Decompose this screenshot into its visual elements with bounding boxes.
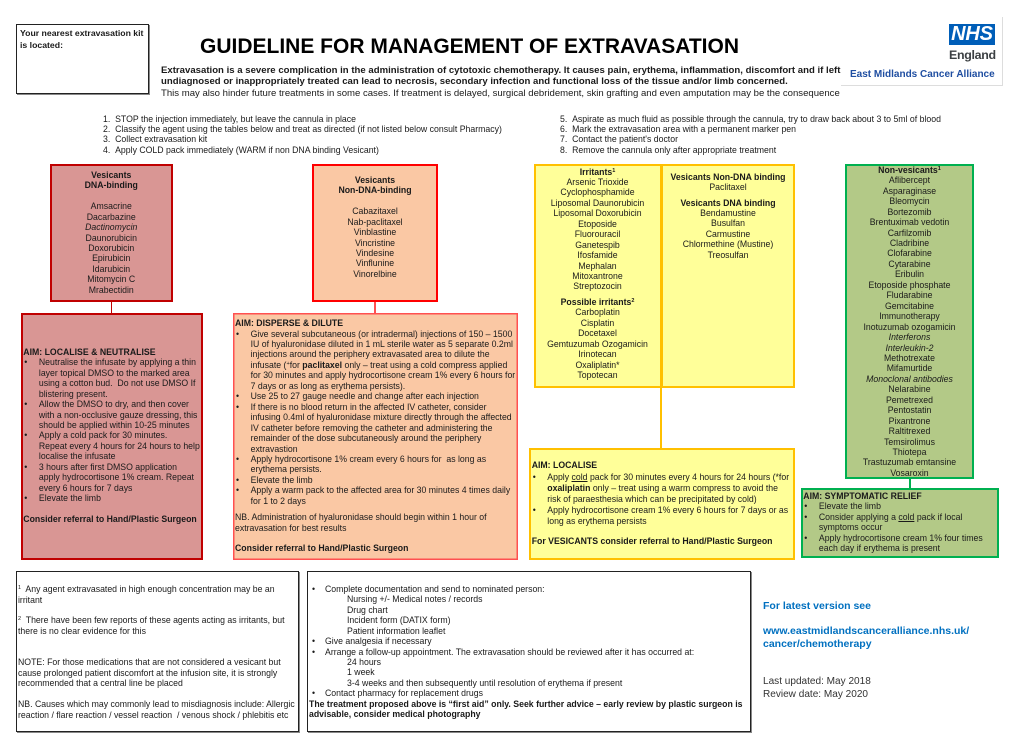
vesicants non-DNA-binding drug list (338, 175, 412, 279)
non-vesicants drug list: Inotuzumab ozogamicin (863, 322, 956, 332)
aim localise and neutralise text: Consider referral to Hand/Plastic Surgeon (23, 514, 197, 524)
irritants drug list: Liposomal Doxorubicin (553, 208, 642, 218)
aim localise and neutralise text: AIM: LOCALISE & NEUTRALISE (23, 347, 156, 357)
vesicants referral note: For VESICANTS consider referral to Hand/Plastic Surgeon (532, 536, 772, 546)
possible irritants drug list: Cisplatin (581, 318, 614, 328)
steps list left: 3. Collect extravasation kit (103, 134, 207, 144)
steps list right: 6. Mark the extravasation area with a permanent marker pen (560, 124, 796, 134)
aim localise and neutralise text: every 6 hours for 7 days (39, 483, 132, 493)
aim disperse and dilute text: Apply a warm pack to the affected area for 30 minutes 4 times daily (251, 485, 510, 495)
vesicants non-DNA-binding drug list: Non-DNA-binding (338, 185, 412, 195)
vesicants DNA binding list: Treosulfan (708, 250, 748, 260)
irritants drug list: Streptozocin (573, 281, 622, 291)
steps list right: 7. Contact the patient's doctor (560, 134, 678, 144)
introduction text (161, 64, 840, 98)
footnotes text: cause prolonged patient discomfort at the infusion site, it is strongly (18, 668, 277, 678)
follow-up actions text: Nursing +/- Medical notes / records (347, 594, 482, 604)
latest version link (763, 600, 970, 650)
follow-up actions text: Complete documentation and send to nominated person: (325, 584, 545, 594)
vesicants non-DNA-binding drug list: Nab-paclitaxel (347, 217, 403, 227)
vesicants DNA-binding drug list: Daunorubicin (86, 233, 137, 243)
hyaluronidase note and referral: Consider referral to Hand/Plastic Surgeon (235, 543, 408, 553)
irritants drug list (551, 166, 644, 291)
follow-up actions text: 3-4 weeks and then subsequently until resolution of erythema if present (347, 678, 622, 688)
latest version link: cancer/chemotherapy (763, 638, 872, 650)
vesicants DNA binding list: Busulfan (711, 218, 745, 228)
kit location box (16, 24, 149, 94)
introduction text: This may also hinder future treatments in some cases. If treatment is delayed, surgical debridement, skin grafting and even amputation may be the consequence (161, 88, 840, 98)
vesicants non-DNA-binding drug list: Cabazitaxel (352, 206, 398, 216)
aim localise and neutralise text: with a non-occlusive gauze dressing, this (39, 410, 197, 420)
panel: follow-up actions (307, 571, 751, 732)
non-vesicants drug list: Carfilzomib (888, 228, 931, 238)
vesicants non-DNA-binding drug list: Vinblastine (354, 227, 396, 237)
vesicants non-DNA binding list: Paclitaxel (709, 182, 747, 192)
connector: green (908, 478, 910, 489)
follow-up actions text: 24 hours (347, 657, 381, 667)
aim localise and neutralise text: Repeat every 4 hours for 24 hours to help (39, 441, 200, 451)
footnotes text: 1 Any agent extravasated in high enough concentration may be an (18, 584, 275, 594)
aim localise text: Apply cold pack for 30 minutes every 4 hours for 24 hours (*for (547, 472, 789, 482)
steps list right: 5. Aspirate as much fluid as possible through the cannula, try to draw back about 3 to 5ml of blood (560, 114, 941, 124)
follow-up actions text: advisable, consider medical photography (309, 709, 481, 719)
vesicants DNA-binding drug list (85, 170, 138, 295)
footnotes text: NOTE: For those medications that are not considered a vesicant but (18, 657, 281, 667)
latest version link: www.eastmidlandscanceralliance.nhs.uk/ (763, 625, 969, 637)
panel: aim symptomatic relief (801, 488, 999, 558)
non-vesicants drug list: Clofarabine (887, 248, 932, 258)
non-vesicants drug list: Gemcitabine (885, 301, 934, 311)
aim localise and neutralise text: layer topical DMSO to the marked area (39, 368, 190, 378)
non-vesicants drug list: Vosaroxin (890, 468, 929, 478)
aim disperse and dilute text: IV catheter before removing the catheter and administering the (251, 423, 492, 433)
irritants drug list: Ganetespib (575, 240, 620, 250)
East Midlands Cancer Alliance wordmark: East Midlands Cancer Alliance (850, 69, 995, 80)
follow-up actions text (309, 584, 742, 719)
review dates: Last updated: May 2018 (763, 676, 871, 687)
irritants drug list: Mitoxantrone (572, 271, 623, 281)
panel: yellow vesicants (661, 164, 795, 388)
non-vesicants drug list: Bleomycin (889, 196, 930, 206)
aim disperse and dilute text: for 30 minutes and apply hydrocortisone cream 1% every 6 hours for (251, 370, 515, 380)
aim localise and neutralise text: Elevate the limb (39, 493, 101, 503)
vesicants non-DNA-binding drug list: Vinflunine (356, 258, 394, 268)
vesicants non-DNA binding list: Vesicants Non-DNA binding (671, 172, 785, 182)
panel: vesicants DNA-binding (50, 164, 172, 302)
non-vesicants drug list: Pixantrone (889, 416, 930, 426)
irritants drug list: Fluorouracil (575, 229, 620, 239)
review dates: Review date: May 2020 (763, 689, 868, 700)
non-vesicants drug list: Etoposide phosphate (869, 280, 950, 290)
irritants drug list: Mephalan (578, 261, 617, 271)
vesicants DNA-binding drug list: Amsacrine (91, 201, 132, 211)
vesicants DNA-binding drug list: Epirubicin (92, 253, 130, 263)
aim disperse and dilute text: infusing 0.4ml of hyaluronidase mixture directly through the affected (251, 412, 512, 422)
aim localise text: long as erythema persists (547, 516, 647, 526)
panel: aim disperse and dilute (233, 313, 518, 560)
non-vesicants drug list: Non-vesicants1 (878, 165, 941, 175)
non-vesicants drug list: Raltitrexed (889, 426, 930, 436)
non-vesicants drug list: Aflibercept (889, 175, 930, 185)
vesicants DNA-binding drug list: Doxorubicin (88, 243, 134, 253)
connector: orange (374, 300, 376, 314)
aim localise and neutralise text: 3 hours after first DMSO application (39, 462, 177, 472)
aim localise text: AIM: LOCALISE (532, 460, 597, 470)
vesicants non-DNA binding list (670, 172, 785, 192)
footnotes text: 2 There have been few reports of these agents acting as irritants, but (18, 615, 285, 625)
non-vesicants drug list: Monoclonal antibodies (866, 374, 953, 384)
aim localise and neutralise text: using a cotton bud. Do not use DMSO If (39, 378, 195, 388)
non-vesicants drug list: Temsirolimus (884, 437, 935, 447)
aim localise text (532, 460, 789, 526)
steps list left: 1. STOP the injection immediately, but leave the cannula in place (103, 114, 356, 124)
kit location text: Your nearest extravasation kit (20, 28, 143, 38)
follow-up actions text: Drug chart (347, 605, 388, 615)
title: GUIDELINE FOR MANAGEMENT OF EXTRAVASATION (200, 35, 739, 58)
hyaluronidase note and referral: extravasation for best results (235, 523, 346, 533)
footnotes text: irritant (18, 595, 42, 605)
possible irritants drug list: Possible irritants2 (561, 297, 634, 307)
footnotes text: recommended that a central line be placed (18, 678, 183, 688)
non-vesicants drug list: Mifamurtide (887, 363, 932, 373)
panel: vesicants non-DNA-binding (312, 164, 438, 302)
aim disperse and dilute text (235, 318, 515, 506)
non-vesicants drug list: Interferons (889, 332, 930, 342)
non-vesicants drug list: Bortezomib (887, 207, 932, 217)
connector: yellow (660, 386, 662, 449)
non-vesicants drug list: Methotrexate (884, 353, 935, 363)
aim localise text: oxaliplatin only – treat using a warm compress to avoid the (547, 483, 778, 493)
aim localise text: Apply hydrocortisone cream 1% every 6 hours for 7 days or as (547, 505, 788, 515)
vesicants DNA binding list: Bendamustine (700, 208, 756, 218)
aim symptomatic relief text: symptoms occur (819, 522, 882, 532)
irritants drug list: Liposomal Daunorubicin (551, 198, 644, 208)
kit location text: is located: (20, 40, 63, 50)
non-vesicants drug list: Interleukin-2 (886, 342, 933, 352)
panel: aim localise and neutralise (21, 313, 202, 560)
irritants drug list: Ifosfamide (577, 250, 618, 260)
aim disperse and dilute text: If there is no blood return in the affected IV catheter, consider (251, 402, 486, 412)
aim disperse and dilute text: Elevate the limb (251, 475, 313, 485)
aim symptomatic relief text (803, 491, 983, 553)
vesicants DNA binding list: Carmustine (706, 229, 750, 239)
non-vesicants drug list: Eribulin (895, 269, 924, 279)
follow-up actions text: Arrange a follow-up appointment. The extravasation should be reviewed after it has occurred at: (325, 647, 694, 657)
panel: footnotes (16, 571, 299, 732)
non-vesicants drug list: Immunotherapy (879, 311, 940, 321)
irritants drug list: Etoposide (578, 219, 617, 229)
panel: irritants (534, 164, 662, 388)
vesicants DNA-binding drug list: Vesicants (91, 170, 131, 180)
aim disperse and dilute text: IU of hyaluronidase diluted in 1 mL sterile water as 5 separate 0.2ml (251, 339, 513, 349)
vesicants DNA-binding drug list: Dacarbazine (87, 212, 136, 222)
footnotes text: reaction / flare reaction / vessel reaction / venous shock / phlebitis etc (18, 710, 288, 720)
review dates (763, 676, 871, 700)
vesicants DNA-binding drug list: Mitomycin C (87, 274, 135, 284)
footnotes text: NB. Causes which may commonly lead to misdiagnosis include: Allergic (18, 699, 295, 709)
aim localise and neutralise text (23, 347, 200, 524)
aim symptomatic relief text: Elevate the limb (819, 501, 881, 511)
vesicants non-DNA-binding drug list: Vinorelbine (353, 269, 397, 279)
aim symptomatic relief text: Consider applying a cold pack if local (819, 512, 962, 522)
non-vesicants drug list: Cytarabine (888, 259, 931, 269)
non-vesicants drug list: Pentostatin (888, 405, 931, 415)
steps list left: 2. Classify the agent using the tables below and treat as directed (if not listed below consult Pharmacy) (103, 124, 502, 134)
footnotes text: there is no clear evidence for this (18, 626, 146, 636)
aim disperse and dilute text: 7 days or as long as erythema persists). (251, 381, 405, 391)
aim disperse and dilute text: injections around the periphery extravasated area to dilute the (251, 349, 490, 359)
vesicants DNA binding list (680, 198, 776, 260)
aim symptomatic relief text: each day if erythema is present (819, 543, 940, 553)
possible irritants drug list: Docetaxel (578, 328, 617, 338)
aim disperse and dilute text: Apply hydrocortisone 1% cream every 6 hours for as long as (251, 454, 486, 464)
vesicants non-DNA-binding drug list: Vesicants (355, 175, 395, 185)
aim disperse and dilute text: remainder of the dose subcutaneously around the periphery (251, 433, 481, 443)
vesicants DNA binding list: Chlormethine (Mustine) (683, 239, 773, 249)
non-vesicants drug list: Trastuzumab emtansine (863, 457, 956, 467)
follow-up actions text: 1 week (347, 667, 375, 677)
panel: aim localise (529, 448, 795, 560)
follow-up actions text: Contact pharmacy for replacement drugs (325, 688, 483, 698)
follow-up actions text: Give analgesia if necessary (325, 636, 432, 646)
aim disperse and dilute text: Use 25 to 27 gauge needle and change after each injection (251, 391, 479, 401)
follow-up actions text: Patient information leaflet (347, 626, 445, 636)
vesicants DNA-binding drug list: Idarubicin (92, 264, 130, 274)
latest version link: For latest version see (763, 600, 871, 612)
aim disperse and dilute text: infusate (+for paclitaxel only – treat using a cold compress applied (251, 360, 507, 370)
steps list left (103, 114, 502, 155)
non-vesicants drug list: Thiotepa (893, 447, 926, 457)
aim localise and neutralise text: localise the infusate (39, 451, 115, 461)
aim localise and neutralise text: apply hydrocortisone 1% cream. Repeat (39, 472, 194, 482)
non-vesicants drug list: Pemetrexed (886, 395, 933, 405)
footnotes text (18, 584, 295, 720)
hyaluronidase note and referral (235, 512, 487, 553)
logo panel (841, 17, 1003, 86)
vesicants non-DNA-binding drug list: Vindesine (356, 248, 394, 258)
non-vesicants drug list: Brentuximab vedotin (870, 217, 949, 227)
follow-up actions text: Incident form (DATIX form) (347, 615, 451, 625)
non-vesicants drug list: Nelarabine (888, 384, 931, 394)
aim disperse and dilute text: AIM: DISPERSE & DILUTE (235, 318, 343, 328)
non-vesicants drug list (863, 165, 956, 478)
aim localise and neutralise text: Allow the DMSO to dry, and then cover (39, 399, 189, 409)
possible irritants drug list (547, 297, 648, 380)
aim localise text: risk of paraesthesia which can be precipitated by cold) (547, 494, 757, 504)
icon: NHS logo: NHS (951, 23, 993, 45)
irritants drug list: Arsenic Trioxide (566, 177, 629, 187)
possible irritants drug list: Irinotecan (578, 349, 617, 359)
aim localise and neutralise text: Neutralise the infusate by applying a thin (39, 357, 196, 367)
panel: non-vesicants (845, 164, 974, 479)
kit location text (20, 28, 144, 50)
non-vesicants drug list: Fludarabine (886, 290, 933, 300)
introduction text: Extravasation is a severe complication in the administration of cytotoxic chemotherapy. It causes pain, erythema, inflammation, discomfort and if left (161, 64, 840, 76)
aim symptomatic relief text: Apply hydrocortisone cream 1% four times (819, 533, 983, 543)
irritants drug list: Cyclophosphamide (560, 187, 635, 197)
steps list left: 4. Apply COLD pack immediately (WARM if non DNA binding Vesicant) (103, 145, 379, 155)
vesicants DNA binding list: Vesicants DNA binding (680, 198, 776, 208)
aim localise and neutralise text: Apply a cold pack for 30 minutes. (39, 430, 167, 440)
steps list right: 8. Remove the cannula only after appropriate treatment (560, 145, 776, 155)
aim disperse and dilute text: Give several subcutaneous (or intradermal) injections of 150 – 1500 (251, 329, 512, 339)
England wordmark: England (949, 48, 996, 62)
vesicants non-DNA-binding drug list: Vincristine (355, 238, 395, 248)
possible irritants drug list: Oxaliplatin* (575, 360, 620, 370)
irritants drug list: Irritants1 (580, 166, 615, 176)
aim symptomatic relief text: AIM: SYMPTOMATIC RELIEF (803, 491, 922, 501)
vesicants DNA-binding drug list: DNA-binding (85, 180, 138, 190)
aim localise and neutralise text: should be applied within 10-25 minutes (39, 420, 190, 430)
possible irritants drug list: Topotecan (577, 370, 618, 380)
aim localise and neutralise text: blistering present. (39, 389, 108, 399)
vesicants DNA-binding drug list: Dactinomycin (85, 222, 137, 232)
non-vesicants drug list: Cladribine (890, 238, 929, 248)
aim disperse and dilute text: extravastion (251, 444, 298, 454)
connector: red (110, 300, 112, 314)
aim disperse and dilute text: erythema persists. (251, 464, 322, 474)
steps list right (560, 114, 941, 155)
possible irritants drug list: Gemtuzumab Ozogamicin (547, 339, 648, 349)
introduction text: undiagnosed or inappropriately treated can lead to necrosis, secondary infection and functional loss of the tissue and/or limb concerned. (161, 76, 788, 87)
aim disperse and dilute text: for 1 to 2 days (251, 496, 306, 506)
non-vesicants drug list: Asparaginase (883, 186, 936, 196)
vesicants DNA-binding drug list: Mrabectidin (89, 285, 134, 295)
hyaluronidase note and referral: NB. Administration of hyaluronidase should begin within 1 hour of (235, 512, 487, 522)
possible irritants drug list: Carboplatin (575, 307, 620, 317)
follow-up actions text: The treatment proposed above is “first aid” only. Seek further advice – early review by plastic surgeon is (309, 699, 742, 709)
